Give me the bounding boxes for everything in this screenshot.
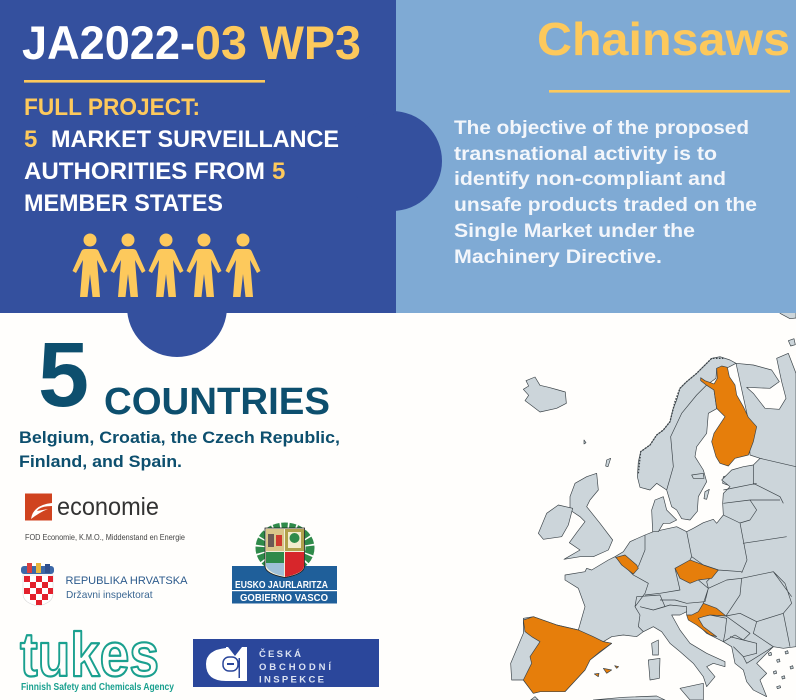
mainland Europe bbox=[511, 458, 796, 697]
Scandinavia bbox=[637, 357, 736, 520]
Russia north-west bbox=[736, 353, 796, 470]
project summary text: MEMBER STATES bbox=[24, 190, 223, 217]
icon: five people bbox=[72, 234, 260, 297]
Croatia bbox=[687, 603, 726, 637]
Ireland bbox=[538, 505, 573, 539]
logo: economie: FOD Economie, K.M.O., Middenstand en Energie bbox=[25, 533, 185, 542]
heading: countries: COUNTRIES bbox=[104, 381, 330, 423]
logo: Eusko Jaurlaritza: EUSKO JAURLARITZA bbox=[235, 580, 328, 591]
Denmark bbox=[652, 497, 677, 532]
logo: Republika Hrvatska: Državni inspektorat bbox=[66, 589, 153, 601]
panel: light blue objective panel bbox=[396, 0, 796, 313]
Czech Republic bbox=[675, 560, 718, 583]
Finland bbox=[701, 366, 757, 466]
Belgium bbox=[616, 555, 638, 574]
panel: dark blue project panel bbox=[0, 0, 442, 357]
project summary text: 5 bbox=[24, 126, 37, 153]
project summary text: FULL PROJECT: bbox=[24, 94, 200, 121]
Corsica, Sardinia, Sicily and North Africa bbox=[531, 640, 703, 700]
jagged Norwegian coast bbox=[638, 358, 723, 473]
objective paragraph: identify non-compliant and bbox=[454, 168, 726, 190]
objective paragraph: The objective of the proposed bbox=[454, 117, 749, 139]
title: JA2022- bbox=[22, 16, 195, 69]
Spain bbox=[523, 617, 619, 693]
heading: Chainsaws: Chainsaws bbox=[537, 13, 790, 65]
logo: Tukes: tukes bbox=[20, 621, 159, 690]
top right islands bbox=[780, 310, 796, 346]
country list: Finland, and Spain. bbox=[19, 452, 182, 471]
objective paragraph: Single Market under the bbox=[454, 220, 695, 242]
map of Europe bbox=[511, 310, 796, 700]
objective paragraph: unsafe products traded on the bbox=[454, 194, 757, 216]
country list bbox=[19, 428, 340, 471]
Great Britain bbox=[564, 473, 613, 559]
project summary text: AUTHORITIES FROM bbox=[24, 158, 265, 185]
objective paragraph: transnational activity is to bbox=[454, 143, 717, 165]
logo: economie bbox=[25, 493, 185, 542]
logo: Ceska obchodni inspekce: INSPEKCE bbox=[259, 674, 324, 686]
title bbox=[22, 16, 361, 69]
logo: Ceska obchodni inspekce bbox=[193, 639, 379, 687]
Iceland bbox=[523, 377, 566, 412]
project summary text: 5 bbox=[272, 158, 285, 185]
title: 03 WP3 bbox=[195, 16, 361, 69]
Aegean islands bbox=[768, 651, 793, 689]
logo: Republika Hrvatska bbox=[21, 563, 188, 606]
logo: Ceska obchodni inspekce: ČESKÁ bbox=[259, 648, 301, 660]
logo: Eusko Jaurlaritza bbox=[232, 527, 337, 604]
small northern islands bbox=[584, 440, 729, 499]
logo: Tukes: Finnish Safety and Chemicals Agency bbox=[21, 681, 174, 693]
project summary text bbox=[24, 94, 339, 217]
national borders bbox=[528, 465, 792, 663]
logo: Eusko Jaurlaritza: GOBIERNO VASCO bbox=[240, 593, 328, 604]
objective paragraph bbox=[454, 117, 757, 268]
logo: economie: economie bbox=[57, 493, 159, 521]
country list: Belgium, Croatia, the Czech Republic, bbox=[19, 428, 340, 447]
heading underline bbox=[549, 90, 790, 93]
logo: Ceska obchodni inspekce: OBCHODNÍ bbox=[259, 662, 331, 673]
big number 5: 5 bbox=[38, 324, 89, 426]
title underline bbox=[24, 80, 265, 83]
objective paragraph: Machinery Directive. bbox=[454, 246, 662, 268]
project summary text: MARKET SURVEILLANCE bbox=[51, 126, 339, 153]
logo: Republika Hrvatska: REPUBLIKA HRVATSKA bbox=[66, 575, 188, 587]
